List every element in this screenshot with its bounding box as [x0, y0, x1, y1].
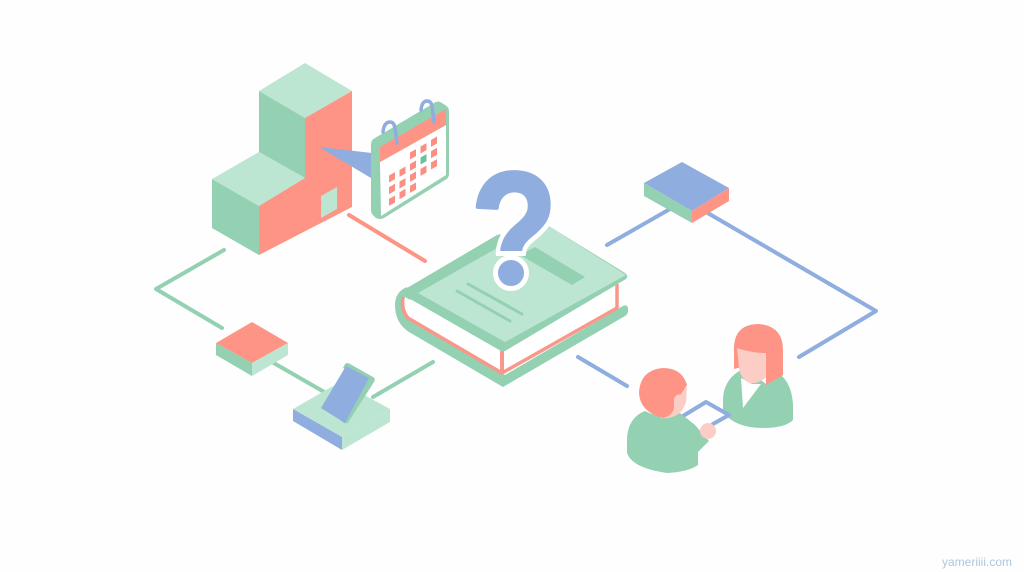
- connector: green path to left box: [156, 250, 433, 397]
- book cover text lines: [457, 284, 522, 321]
- icon: book: [395, 225, 628, 387]
- icon: blue-top box: [644, 162, 729, 223]
- book cover: [403, 225, 627, 352]
- icon: tablet: [683, 402, 729, 424]
- book cover label bar: [520, 247, 585, 285]
- connector: blue lines: [578, 209, 876, 386]
- question mark: ?: [471, 138, 557, 324]
- icon: calendar pointer: [319, 147, 372, 178]
- icon: phone on stand: [293, 363, 390, 450]
- watermark: yameriiii.com: [942, 555, 1012, 569]
- question mark: [476, 170, 551, 291]
- isometric scene: [154, 63, 878, 473]
- icon: isometric building: [212, 63, 352, 255]
- question mark: ?: [471, 138, 557, 324]
- icon: woman: [723, 324, 793, 428]
- connector: salmon line: [349, 215, 425, 261]
- book bottom cover and spine: [395, 287, 628, 387]
- icon: man: [627, 368, 716, 473]
- book pages: [403, 284, 617, 373]
- icon: calendar: [371, 101, 449, 219]
- icon: salmon-top box: [216, 322, 288, 376]
